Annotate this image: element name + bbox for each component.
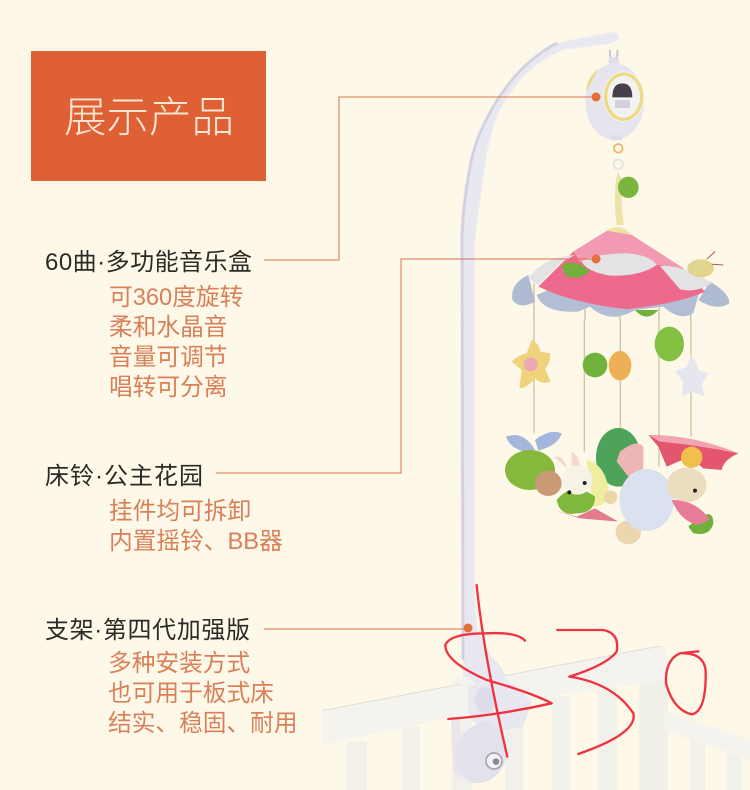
- leaf: [618, 177, 639, 198]
- leader lines: [216, 97, 596, 629]
- block: music box text: 可360度旋转: [109, 284, 243, 311]
- bee: [687, 259, 714, 277]
- canopy: [512, 227, 729, 320]
- crib: [322, 646, 750, 790]
- bee toy: [506, 432, 562, 452]
- rabbit: [587, 460, 608, 507]
- block: music box text: 60曲·多功能音乐盒: [45, 249, 252, 276]
- block: mobile text: 内置摇铃、BB器: [109, 528, 283, 555]
- block: music box text: 柔和水晶音: [109, 314, 227, 341]
- block: stand text: [45, 617, 298, 737]
- block: mobile text: 挂件均可拆卸: [109, 498, 251, 525]
- music box: [585, 50, 644, 225]
- block: stand text: 结实、稳固、耐用: [108, 710, 298, 737]
- block: mobile text: 床铃·公主花园: [45, 463, 203, 490]
- white flower: [675, 355, 708, 397]
- pink wing: [648, 435, 738, 470]
- block: stand text: 也可用于板式床: [108, 680, 274, 707]
- clamp: [450, 627, 532, 783]
- block: stand text: 多种安装方式: [108, 650, 250, 677]
- block: mobile text: [45, 463, 283, 555]
- sheep: [616, 520, 641, 544]
- block: music box text: 音量可调节: [109, 344, 227, 371]
- title: 展示产品: [64, 95, 234, 142]
- block: music box text: 唱转可分离: [109, 374, 227, 401]
- hanging toys: [505, 320, 738, 544]
- block: stand text: 支架·第四代加强版: [45, 617, 250, 644]
- round melon: [596, 428, 641, 487]
- markers: [464, 92, 600, 632]
- panel: title box: [31, 51, 266, 181]
- stand arm: [462, 32, 619, 680]
- block: music box text: [45, 249, 252, 401]
- handwritten price: [445, 585, 706, 757]
- yellow flower: [512, 340, 551, 388]
